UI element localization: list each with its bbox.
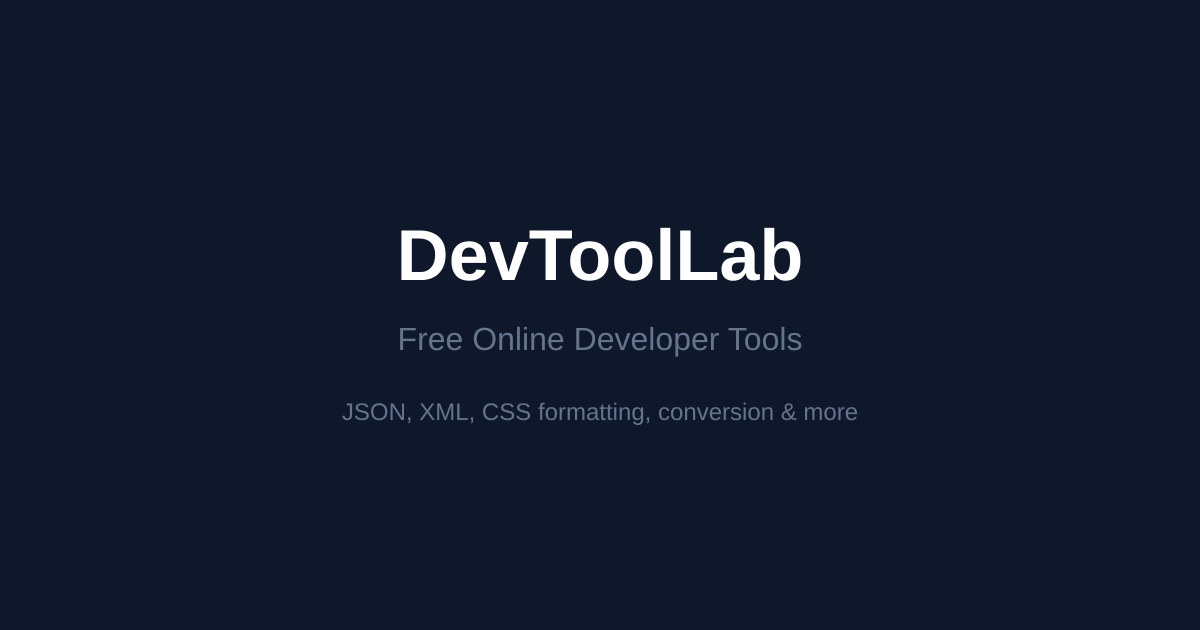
title: DevToolLab: [397, 216, 803, 296]
subtitle: Free Online Developer Tools: [398, 321, 802, 357]
description: JSON, XML, CSS formatting, conversion & more: [342, 399, 858, 426]
